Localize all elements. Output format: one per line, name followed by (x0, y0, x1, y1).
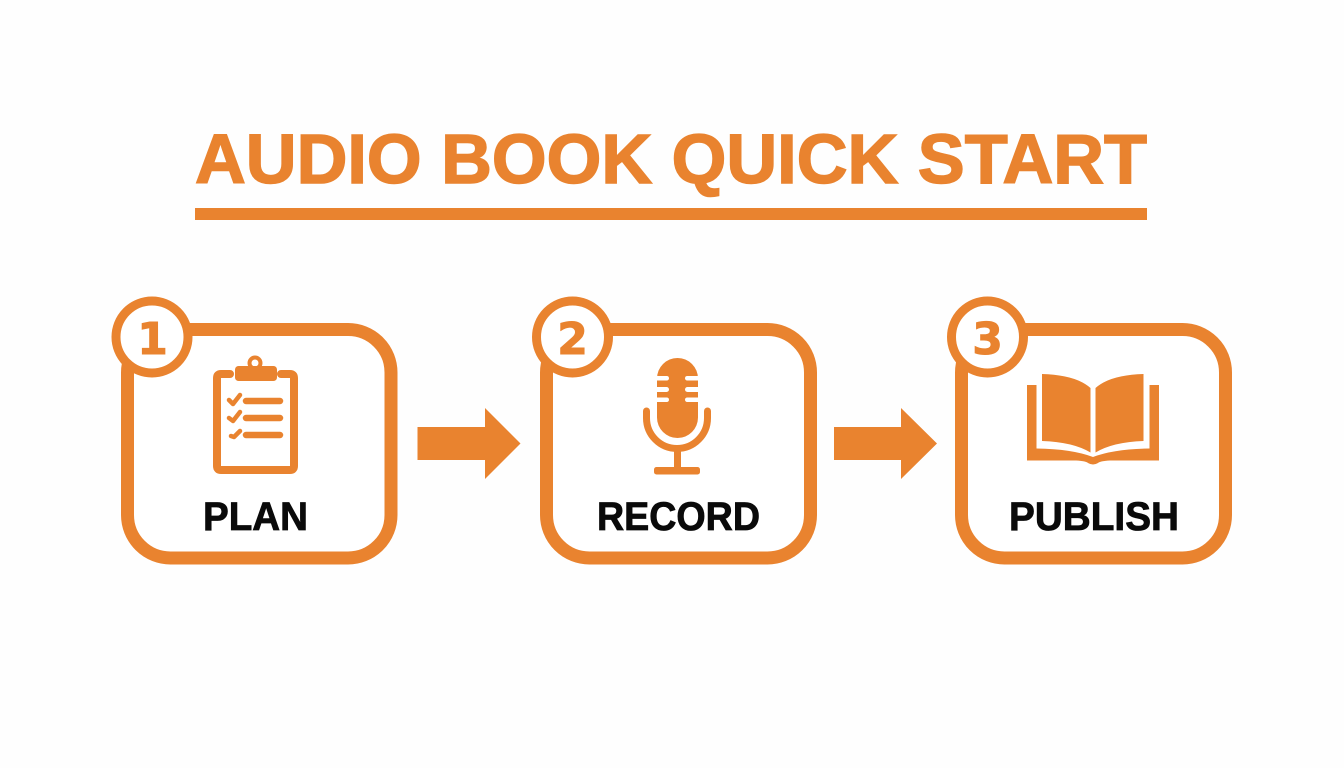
icon: clipboard (217, 358, 294, 470)
number badge 2 (536, 301, 608, 373)
title: AUDIO BOOK QUICK START (195, 120, 1147, 198)
panel frame (128, 330, 391, 558)
icon: open book (1027, 374, 1159, 464)
panel: step 1 plan (116, 301, 391, 558)
panel frame (962, 330, 1226, 558)
panel: step 2 record (536, 301, 810, 558)
number badge 3: 3 (972, 314, 1003, 365)
number badge 1: 1 (137, 314, 168, 365)
number badge 1 (116, 301, 188, 373)
panel: step 3 publish (952, 301, 1226, 558)
label: record: RECORD (597, 495, 760, 539)
title underline (195, 208, 1147, 220)
arrow: record to publish (834, 408, 937, 479)
icon: microphone (646, 358, 708, 474)
number badge 3 (952, 301, 1024, 373)
number badge 2: 2 (557, 314, 588, 365)
label: publish: PUBLISH (1009, 495, 1179, 539)
arrow: plan to record (418, 408, 520, 479)
panel frame (546, 330, 810, 558)
label: plan: PLAN (203, 495, 308, 539)
